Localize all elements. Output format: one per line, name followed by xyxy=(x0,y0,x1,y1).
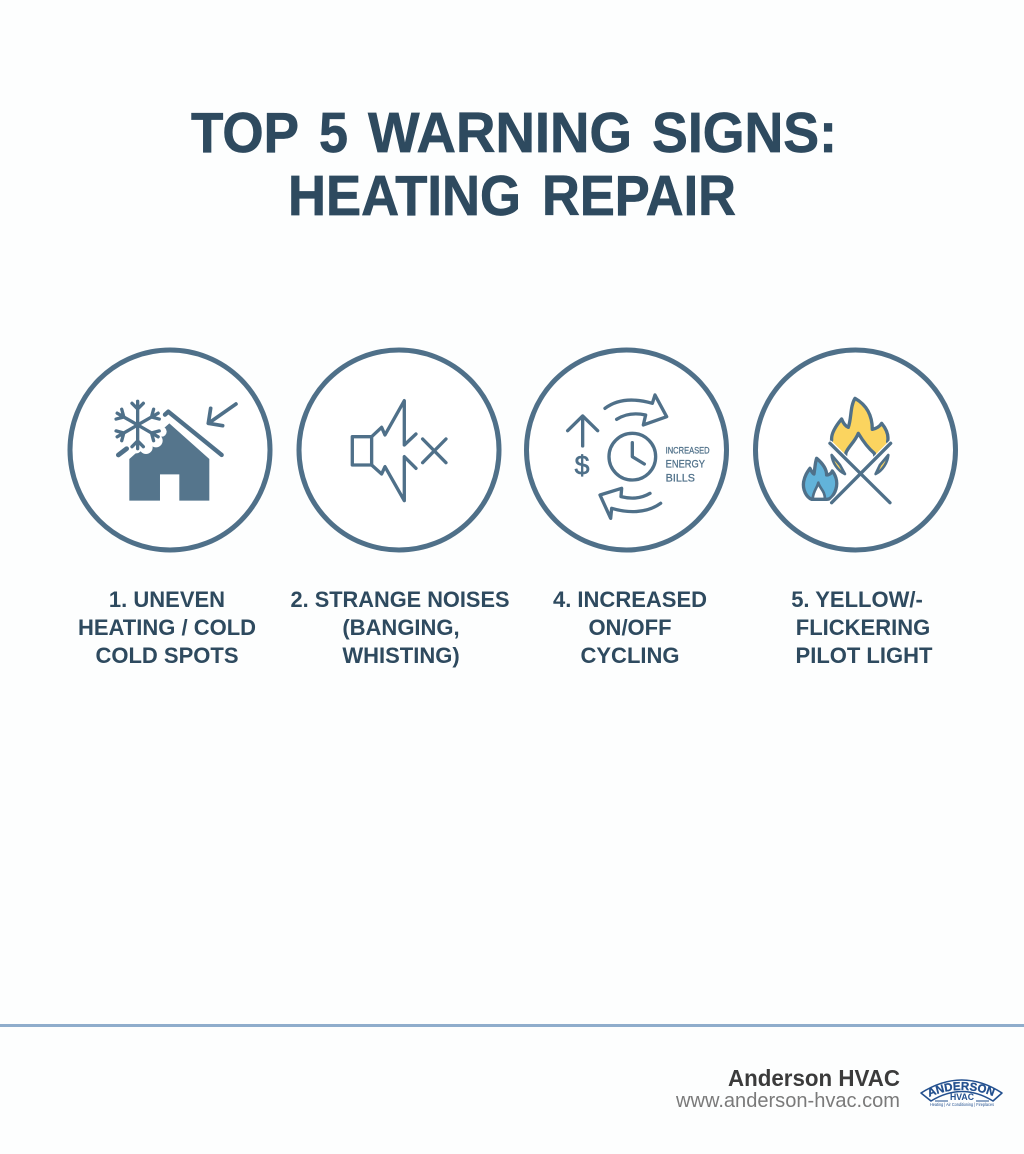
icon: flames crossed out xyxy=(803,398,891,503)
label 4: PILOT LIGHT xyxy=(796,643,933,668)
label 3: ON/OFF xyxy=(588,615,672,640)
footer url: www.anderson-hvac.com xyxy=(675,1090,900,1112)
logo: Anderson HVAC xyxy=(920,1079,1003,1107)
label 1: HEATING / COLD xyxy=(78,615,256,640)
inner icon text: ENERGY xyxy=(666,458,705,470)
title: SIGNS: xyxy=(652,101,837,165)
title: REPAIR xyxy=(542,164,736,228)
title: HEATING xyxy=(288,164,521,228)
label 2: 2. STRANGE NOISES xyxy=(290,587,510,612)
icon: house with snowflake xyxy=(114,401,236,501)
panel: pilot light xyxy=(756,350,956,668)
panel: strange noises xyxy=(290,350,510,668)
title: WARNING xyxy=(368,101,632,165)
title: TOP xyxy=(191,101,299,165)
icon circle 4 xyxy=(756,350,956,550)
logo: Anderson HVAC: HVAC xyxy=(950,1092,974,1102)
label 3: 4. INCREASED xyxy=(553,587,707,612)
label 3 xyxy=(553,587,707,668)
label 2: (BANGING, xyxy=(342,615,460,640)
label 4 xyxy=(791,587,933,668)
label 4: 5. YELLOW/- xyxy=(791,587,923,612)
label 2: WHISTING) xyxy=(342,643,460,668)
icon: speaker with x xyxy=(352,401,446,501)
logo: Anderson HVAC: ANDERSON xyxy=(929,1082,996,1097)
inner icon text: BILLS xyxy=(666,472,695,484)
icon circle 3 xyxy=(526,350,726,550)
panel: on/off cycling xyxy=(526,350,726,668)
label 4: FLICKERING xyxy=(796,615,930,640)
inner icon text: INCREASED xyxy=(666,445,710,455)
icon: cycling clock and dollar xyxy=(568,395,710,518)
label 1: 1. UNEVEN xyxy=(109,587,225,612)
title: 5 xyxy=(319,101,348,165)
footer company name: Anderson HVAC xyxy=(728,1065,900,1091)
label 1: COLD SPOTS xyxy=(95,643,239,668)
icon circle 2 xyxy=(299,350,499,550)
inner icon text xyxy=(666,445,710,484)
footer rule xyxy=(0,1024,1024,1027)
panel: uneven heating xyxy=(70,350,270,668)
icon circle 1 xyxy=(70,350,270,550)
label 3: CYCLING xyxy=(580,643,680,668)
logo: Anderson HVAC: Heating | Air Conditioning | Fireplaces xyxy=(930,1102,995,1107)
icon: cycling clock and dollar: $ xyxy=(575,451,590,481)
label 1 xyxy=(78,587,256,668)
label 2 xyxy=(290,587,510,668)
title xyxy=(191,101,837,228)
